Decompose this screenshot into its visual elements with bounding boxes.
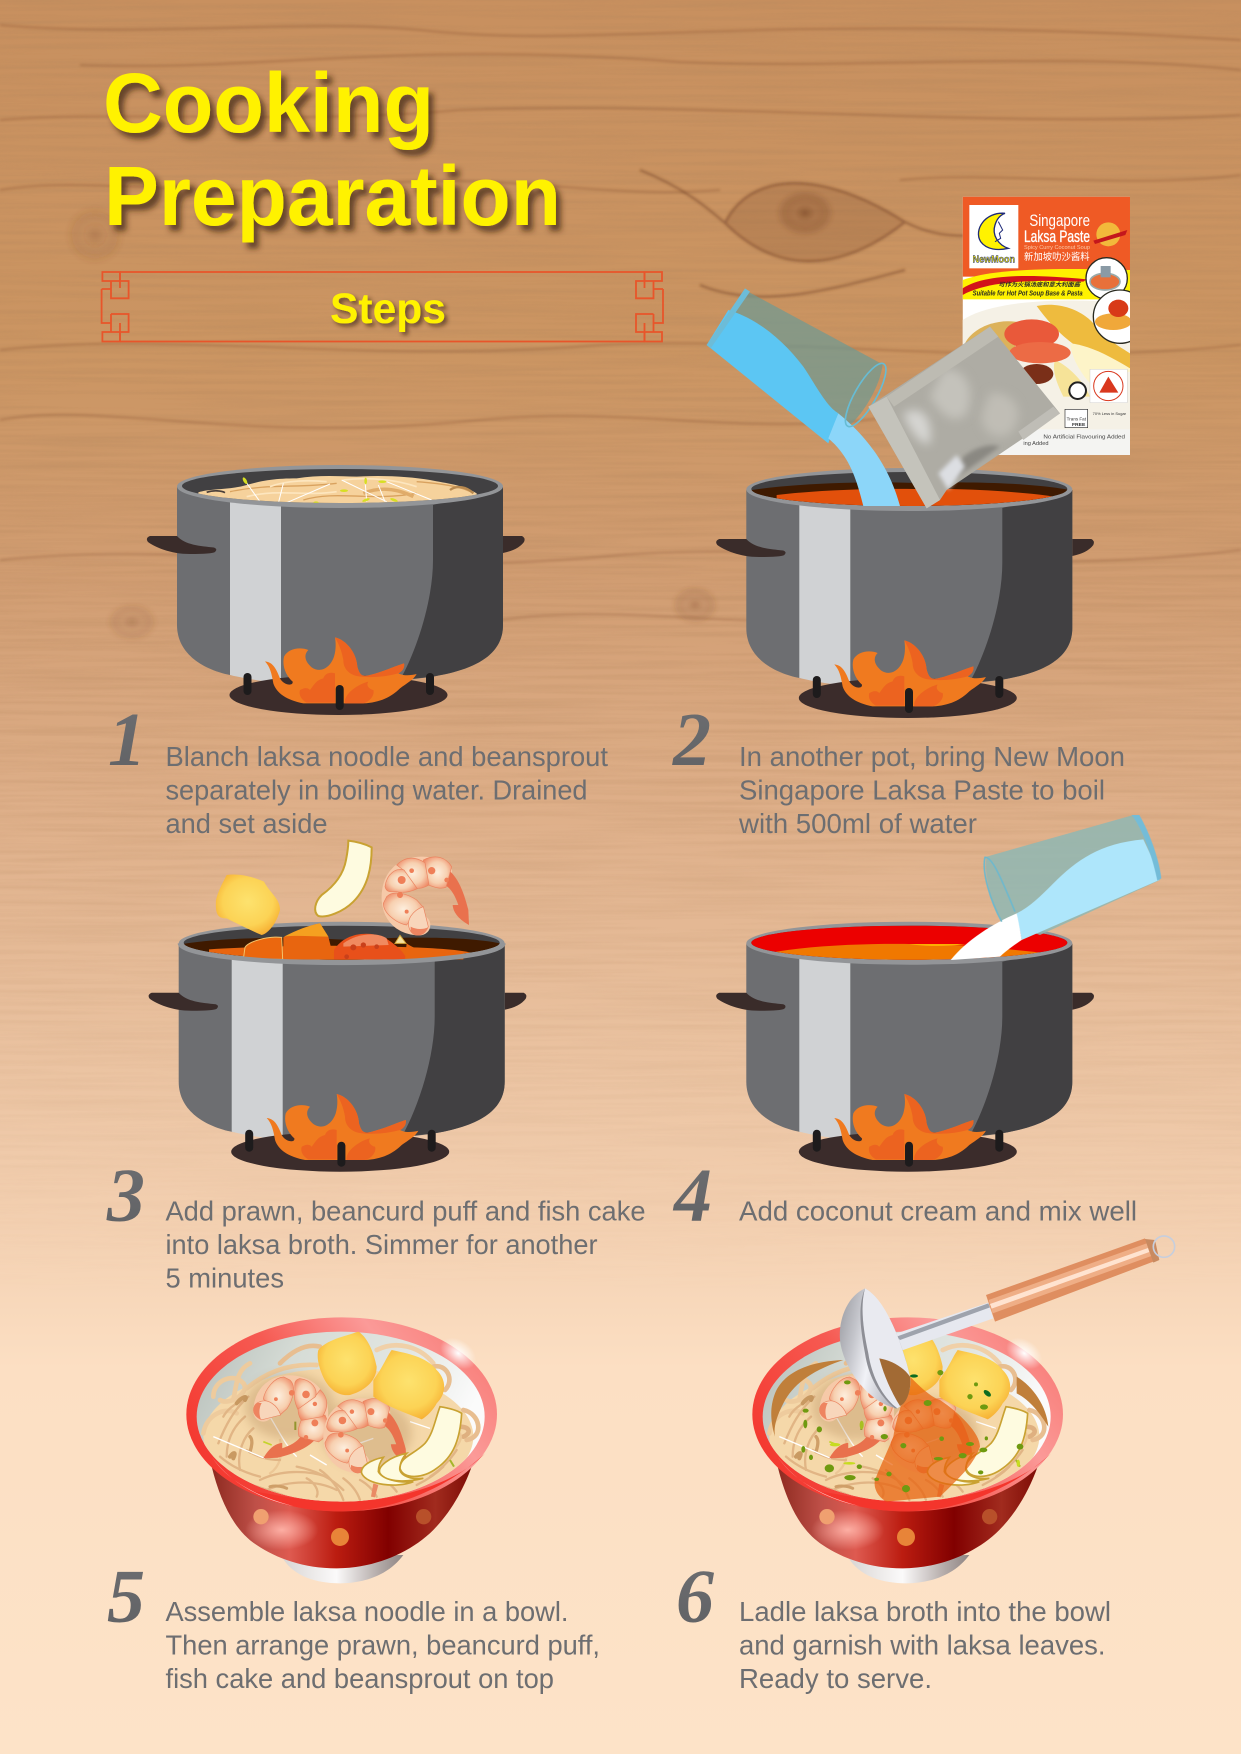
step 2 text bbox=[738, 741, 1125, 839]
product box: New Moon Singapore Laksa Paste: Spicy Curry Coconut Soup bbox=[1024, 245, 1090, 251]
step 1 text: and set aside bbox=[166, 808, 328, 839]
step 4 illustration: pot with coconut cream bbox=[716, 917, 1094, 1172]
step 2 text: Singapore Laksa Paste to boil bbox=[739, 774, 1105, 806]
step 3 text: into laksa broth. Simmer for another bbox=[166, 1229, 598, 1260]
step 5 text bbox=[166, 1596, 600, 1694]
product box: New Moon Singapore Laksa Paste: FREE bbox=[1072, 422, 1086, 428]
product box: New Moon Singapore Laksa Paste: Suitable for Hot Pot Soup Base & Pasta bbox=[973, 288, 1083, 297]
step 3 text: Add prawn, beancurd puff and fish cake bbox=[166, 1196, 646, 1226]
title: Cooking bbox=[103, 56, 434, 150]
step 3 number: 3 bbox=[106, 1154, 145, 1238]
step 2 number: 2 bbox=[672, 698, 711, 782]
step 6 illustration: bowl with broth and ladle bbox=[752, 1317, 1063, 1583]
step 5 text: fish cake and beansprout on top bbox=[166, 1663, 554, 1694]
banner heading: Steps: Steps bbox=[330, 285, 446, 333]
product box: New Moon Singapore Laksa Paste: Singapore bbox=[1029, 211, 1090, 230]
step 1 number: 1 bbox=[108, 698, 146, 782]
step 5 text: Then arrange prawn, beancurd puff, bbox=[166, 1630, 600, 1660]
product box: New Moon Singapore Laksa Paste: 70% Less in Sugar bbox=[1093, 412, 1127, 416]
background: wood texture fading to peach bbox=[0, 0, 1241, 1328]
product box: New Moon Singapore Laksa Paste: No Artificial Flavouring Added bbox=[1043, 434, 1125, 440]
product box: New Moon Singapore Laksa Paste: ing Added bbox=[1023, 441, 1049, 447]
ladle bbox=[840, 1236, 1175, 1408]
coconut cream glass and stream (step 4) bbox=[951, 815, 1161, 960]
product box: New Moon Singapore Laksa Paste: 新加坡叻沙酱料 bbox=[1024, 249, 1090, 263]
step 1 illustration: pot with noodles and beansprouts bbox=[147, 465, 525, 715]
step 1 text bbox=[166, 741, 608, 839]
step 2 text: with 500ml of water bbox=[738, 808, 977, 839]
step 2 text: In another pot, bring New Moon bbox=[739, 741, 1125, 772]
product box: New Moon Singapore Laksa Paste: Laksa Paste bbox=[1024, 227, 1090, 246]
step 6 text: Ready to serve. bbox=[739, 1663, 932, 1694]
step 4 text: Add coconut cream and mix well bbox=[739, 1196, 1137, 1226]
step 3 text: 5 minutes bbox=[166, 1262, 284, 1294]
product box: New Moon Singapore Laksa Paste: NewMoon bbox=[973, 254, 1015, 265]
prawn bbox=[383, 857, 469, 935]
product box: New Moon Singapore Laksa Paste: Trans Fat bbox=[1067, 417, 1087, 422]
step 6 number: 6 bbox=[676, 1555, 714, 1639]
step 5 text: Assemble laksa noodle in a bowl. bbox=[166, 1596, 568, 1627]
step 1 text: Blanch laksa noodle and beansprout bbox=[166, 741, 608, 772]
step 1 text: separately in boiling water. Drained bbox=[166, 774, 588, 806]
step 6 text: and garnish with laksa leaves. bbox=[739, 1630, 1106, 1660]
step 3 text bbox=[166, 1196, 646, 1294]
title: Preparation bbox=[104, 149, 561, 243]
fish cake slice bbox=[315, 841, 372, 916]
step 5 number: 5 bbox=[107, 1555, 145, 1639]
step 4 number: 4 bbox=[672, 1154, 712, 1238]
step 6 text bbox=[739, 1596, 1111, 1694]
product box: New Moon Singapore Laksa Paste: 可作为火锅汤底和意大利面酱 bbox=[998, 280, 1081, 289]
moon logo bbox=[978, 213, 1008, 249]
beancurd puff bbox=[216, 875, 280, 935]
step 3 illustration: pot with ingredients in broth bbox=[149, 922, 526, 1172]
title bbox=[103, 56, 561, 243]
step 2 illustration: pot with laksa broth bbox=[716, 468, 1094, 718]
step 6 text: Ladle laksa broth into the bowl bbox=[739, 1596, 1111, 1627]
foil sachet bbox=[868, 327, 1060, 508]
steps banner frame bbox=[102, 272, 663, 342]
step 5 illustration: assembled laksa bowl bbox=[186, 1317, 497, 1583]
water glass and stream (step 2) bbox=[707, 288, 900, 506]
product box: New Moon Singapore Laksa Paste bbox=[963, 197, 1147, 455]
ingredients dropping into pot: beancurd puff, fish cake, prawn bbox=[180, 841, 503, 963]
